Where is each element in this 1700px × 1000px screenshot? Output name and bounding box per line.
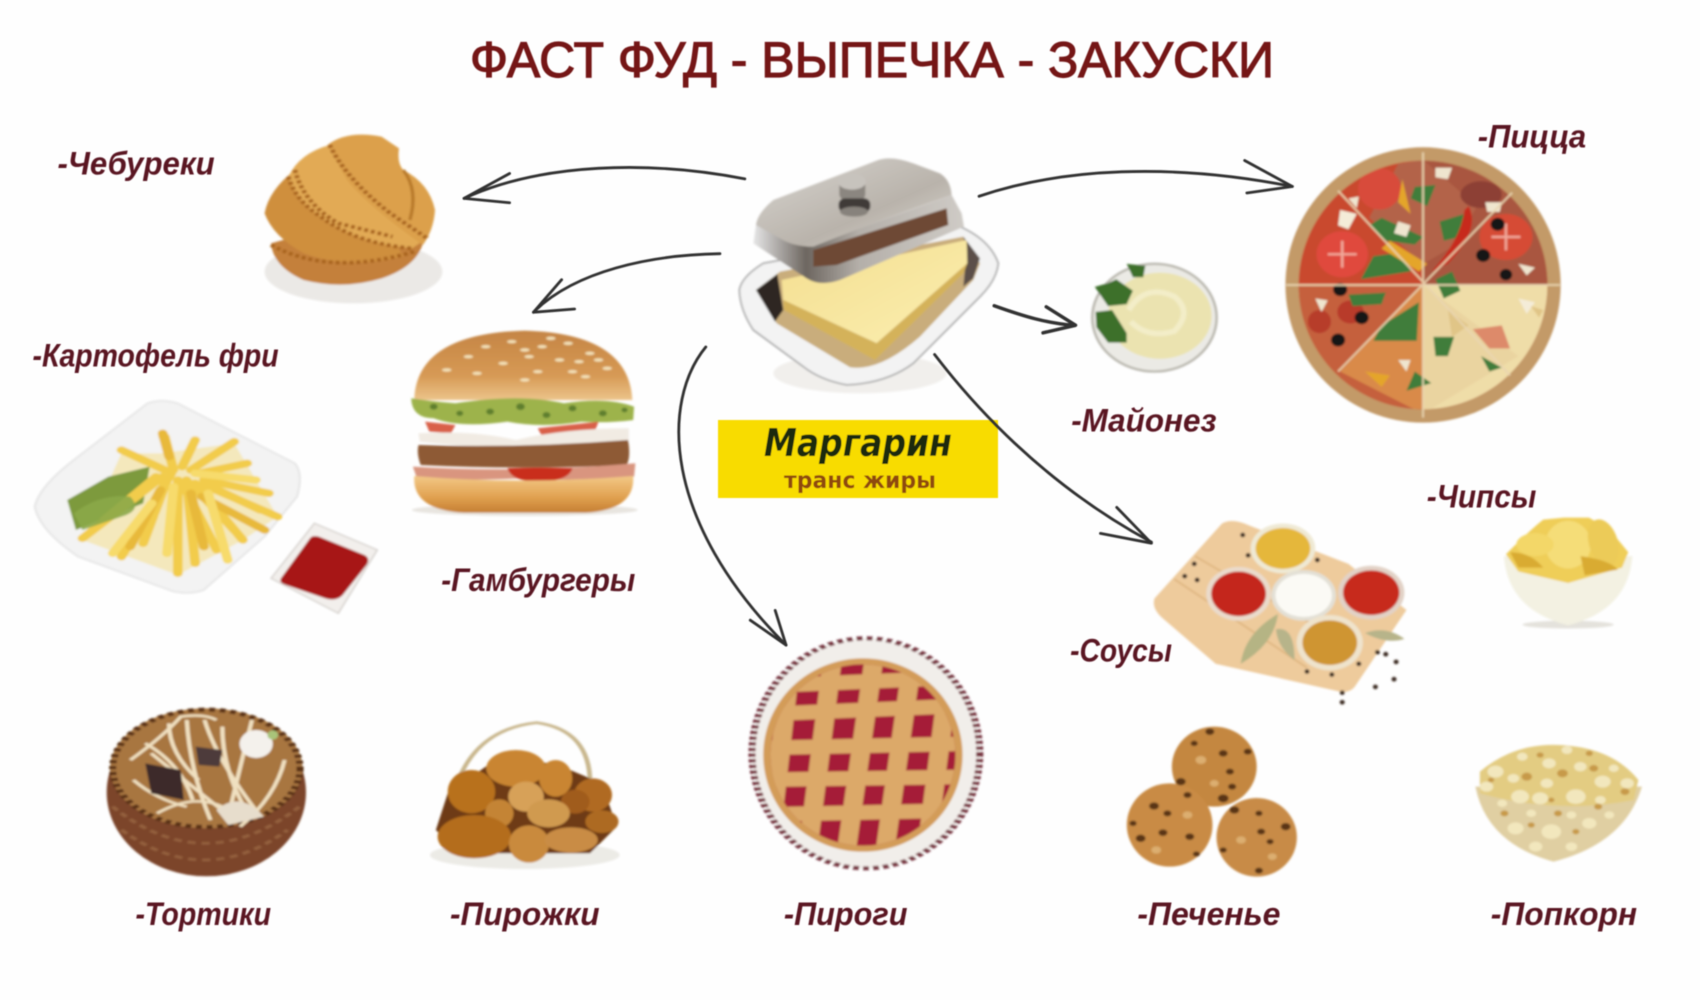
label: mayonnaise: -Майонез — [1071, 403, 1216, 439]
label: cookies: -Печенье — [1137, 896, 1280, 932]
fries salad leaf — [67, 467, 150, 530]
fries — [82, 433, 278, 573]
icon: french fries plate with ketchup — [35, 401, 377, 613]
chocolate chips — [1129, 728, 1291, 874]
arrow: margarine to sauces — [935, 355, 1151, 543]
food illustrations — [35, 135, 1642, 877]
label: popcorn: -Попкорн — [1491, 896, 1637, 932]
label: french fries: -Картофель фри — [33, 337, 279, 373]
callout: margarine trans fats: Маргарин — [764, 421, 952, 465]
label: cakes: -Тортики — [136, 896, 271, 932]
icon: lattice pie on plate — [744, 638, 987, 868]
pepper grains — [1182, 533, 1399, 705]
arrow: margarine to chebureki — [464, 167, 745, 203]
fries underlay — [82, 443, 278, 575]
icon: chebureki on a plate — [265, 135, 442, 303]
label: small pies: -Пирожки — [450, 896, 600, 932]
callout: margarine trans fats: транс жиры — [784, 468, 936, 494]
icon: pizza — [1285, 147, 1561, 423]
ketchup dish — [271, 523, 377, 613]
arrow: margarine to hamburgers — [533, 254, 720, 312]
icon: lid knob — [838, 174, 870, 217]
arrows — [464, 160, 1292, 645]
icon: mayonnaise bowl — [1092, 264, 1217, 372]
icon: sauces board — [1154, 521, 1406, 705]
label: chips: -Чипсы — [1427, 478, 1537, 514]
icon: cake — [107, 708, 306, 876]
icon: butter dish with margarine — [739, 158, 998, 393]
arrow: margarine to pizza — [979, 160, 1292, 196]
label: chebureki: -Чебуреки — [57, 146, 215, 182]
popcorn kernels — [1480, 746, 1634, 852]
label: hamburgers: -Гамбургеры — [441, 562, 636, 598]
label: pizza: -Пицца — [1478, 118, 1586, 154]
label: pies: -Пироги — [784, 896, 908, 932]
food labels — [33, 118, 1637, 932]
title: ФАСТ ФУД - ВЫПЕЧКА - ЗАКУСКИ — [470, 32, 1274, 88]
label: sauces: -Соусы — [1070, 632, 1172, 668]
icon: popcorn bowl — [1475, 745, 1642, 862]
icon: cookies — [1127, 727, 1297, 877]
sesame seeds — [442, 337, 612, 382]
icon: pirozhki in basket — [430, 723, 620, 869]
arrow: margarine to mayonnaise — [994, 306, 1076, 333]
arrow: margarine to pies — [679, 347, 786, 645]
callout: margarine trans fats — [718, 420, 998, 498]
icon: chips bowl — [1504, 516, 1632, 628]
icon: hamburger — [411, 331, 638, 516]
